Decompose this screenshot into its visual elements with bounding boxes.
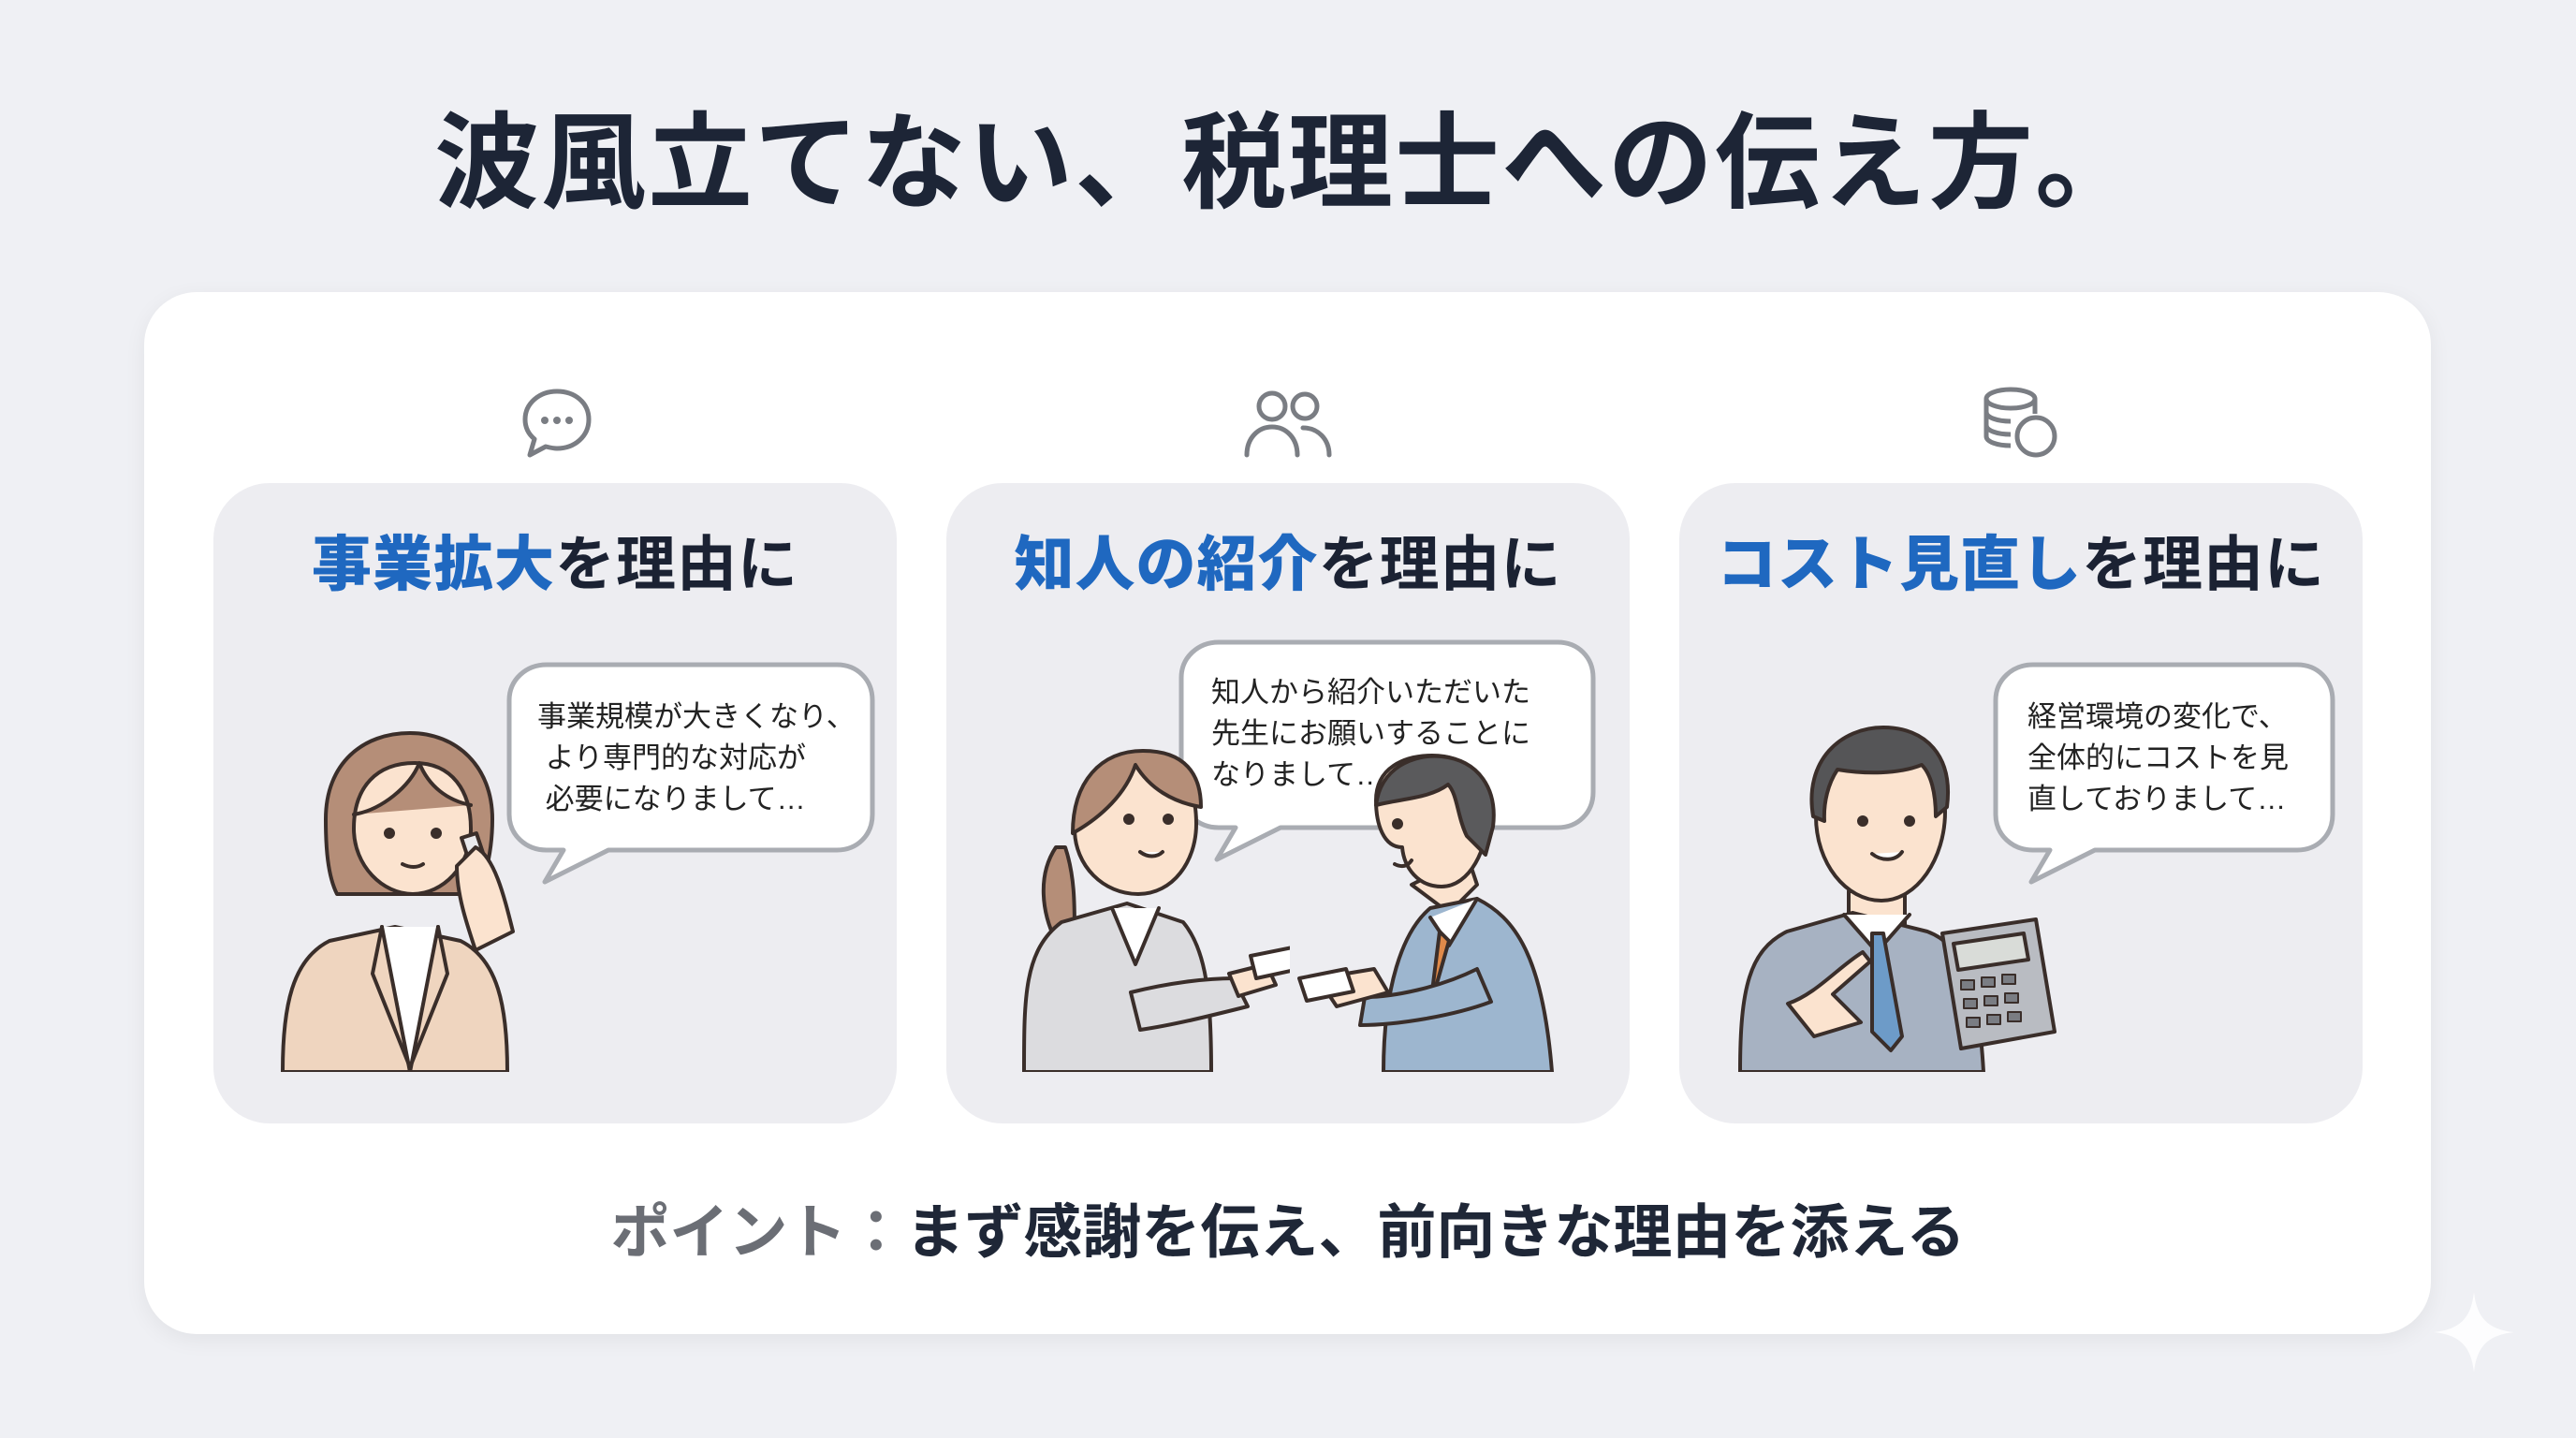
icon: people — [1245, 391, 1331, 457]
icon: sparkle — [2436, 1294, 2512, 1371]
speech bubble 1: 必要になりまして… — [546, 783, 806, 815]
person: man with calculator — [1738, 726, 2056, 1072]
heading: introduction: 知人の紹介を理由に — [1015, 531, 1561, 598]
panel: cost review — [1679, 483, 2363, 1123]
panel: introduction — [946, 483, 1630, 1123]
icon: speech bubble — [522, 389, 592, 457]
speech bubble 3: 経営環境の変化で、 — [2027, 700, 2288, 733]
title: 波風立てない、税理士への伝え方。 — [434, 105, 2142, 222]
person: man exchanging card — [1297, 754, 1554, 1072]
speech bubble 1: より専門的な対応が — [546, 741, 806, 774]
panel: business expansion — [213, 483, 897, 1123]
main card — [144, 292, 2431, 1334]
speech bubble 3: 直しておりまして… — [2027, 783, 2286, 815]
icon: coins — [1984, 388, 2057, 457]
speech bubble 3: 全体的にコストを見 — [2027, 741, 2289, 774]
speech bubble 3 — [1994, 663, 2334, 884]
speech bubble 2: 知人から紹介いただいた — [1211, 676, 1530, 709]
speech bubble 1: 事業規模が大きくなり、 — [537, 700, 856, 733]
heading: business expansion: 事業拡大を理由に — [312, 531, 798, 598]
speech bubble 1 — [507, 663, 874, 884]
speech bubble 2 — [1179, 640, 1595, 861]
speech bubble 2: なりまして… — [1211, 758, 1384, 791]
person: woman exchanging card — [1022, 749, 1290, 1072]
person: woman on phone — [281, 731, 515, 1072]
speech bubble 2: 先生にお願いすることに — [1211, 717, 1530, 750]
footer point text: ポイント：まず感謝を伝え、前向きな理由を添える — [610, 1200, 1966, 1266]
heading: cost review: コスト見直しを理由に — [1717, 531, 2325, 598]
